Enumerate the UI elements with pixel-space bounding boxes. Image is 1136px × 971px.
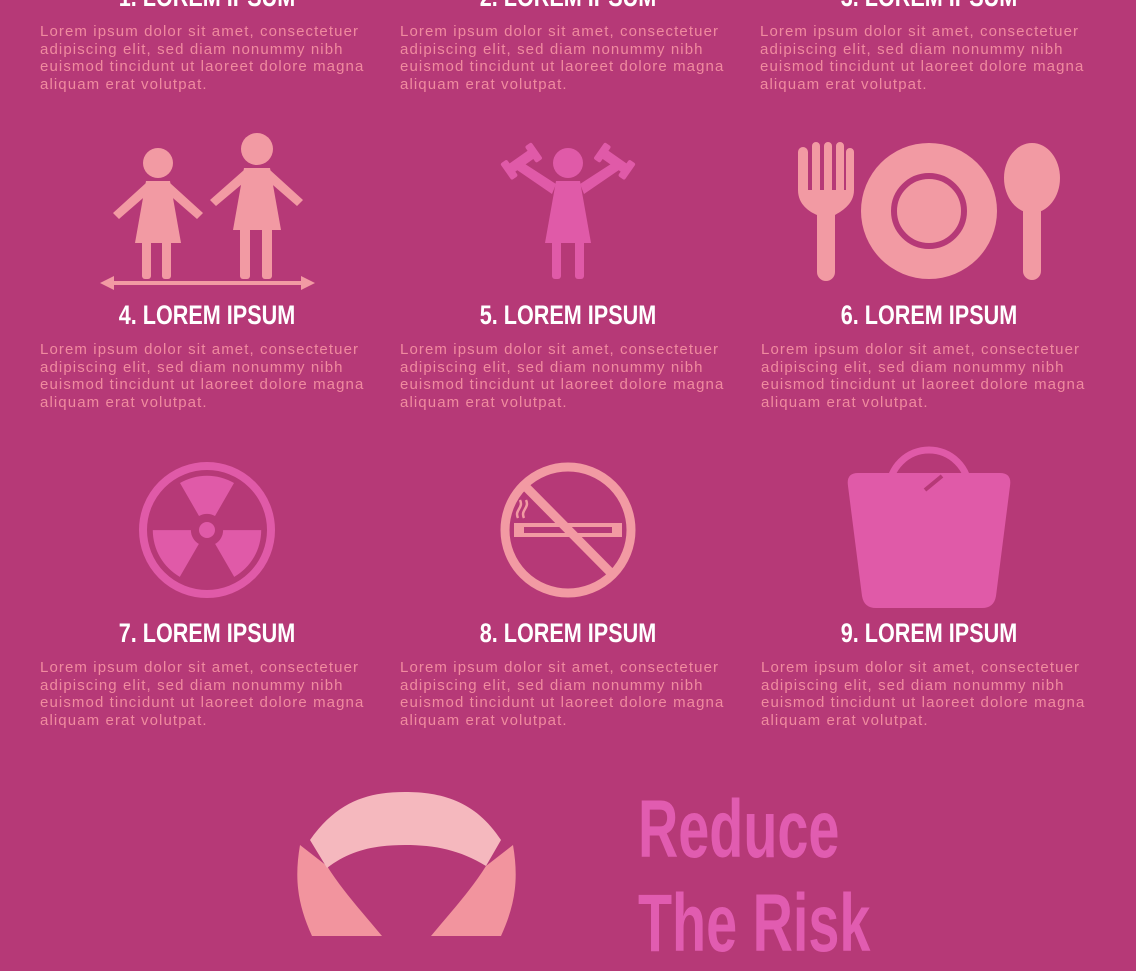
text 4: adipiscing elit, sed diam nonummy nibh <box>40 359 344 376</box>
icon: radiation <box>143 466 271 594</box>
text 5: adipiscing elit, sed diam nonummy nibh <box>400 359 704 376</box>
text 6: Lorem ipsum dolor sit amet, consectetuer <box>761 341 1080 358</box>
text 7: Lorem ipsum dolor sit amet, consectetuer <box>40 659 359 676</box>
text 2: Lorem ipsum dolor sit amet, consectetuer <box>400 23 719 40</box>
text 4 <box>40 341 364 411</box>
icon: fork plate spoon <box>798 142 1060 281</box>
text 6: aliquam erat volutpat. <box>761 394 929 411</box>
text 6 <box>761 341 1085 411</box>
text 8: aliquam erat volutpat. <box>400 712 568 729</box>
text 1: aliquam erat volutpat. <box>40 76 208 93</box>
text 8: Lorem ipsum dolor sit amet, consectetuer <box>400 659 719 676</box>
text 7: adipiscing elit, sed diam nonummy nibh <box>40 677 344 694</box>
title: Reduce The Risk <box>638 784 870 969</box>
text 6: euismod tincidunt ut laoreet dolore magna <box>761 376 1085 393</box>
heading 4: 4. LOREM IPSUM <box>119 300 295 330</box>
text 3: adipiscing elit, sed diam nonummy nibh <box>760 41 1064 58</box>
text 3: aliquam erat volutpat. <box>760 76 928 93</box>
text 5: aliquam erat volutpat. <box>400 394 568 411</box>
text 9: Lorem ipsum dolor sit amet, consectetuer <box>761 659 1080 676</box>
text 8: euismod tincidunt ut laoreet dolore magna <box>400 694 724 711</box>
heading 6: 6. LOREM IPSUM <box>841 300 1017 330</box>
text 2: aliquam erat volutpat. <box>400 76 568 93</box>
heading 8: 8. LOREM IPSUM <box>480 618 656 648</box>
text 1: adipiscing elit, sed diam nonummy nibh <box>40 41 344 58</box>
text 5: euismod tincidunt ut laoreet dolore magna <box>400 376 724 393</box>
text 4: aliquam erat volutpat. <box>40 394 208 411</box>
text 5 <box>400 341 724 411</box>
text 8: adipiscing elit, sed diam nonummy nibh <box>400 677 704 694</box>
text 2 <box>400 23 724 93</box>
text 4: euismod tincidunt ut laoreet dolore magna <box>40 376 364 393</box>
text 1: Lorem ipsum dolor sit amet, consectetuer <box>40 23 359 40</box>
text 9: adipiscing elit, sed diam nonummy nibh <box>761 677 1065 694</box>
text 5: Lorem ipsum dolor sit amet, consectetuer <box>400 341 719 358</box>
heading 5: 5. LOREM IPSUM <box>480 300 656 330</box>
text 3: euismod tincidunt ut laoreet dolore magna <box>760 58 1084 75</box>
text 7: euismod tincidunt ut laoreet dolore magna <box>40 694 364 711</box>
heading 9: 9. LOREM IPSUM <box>841 618 1017 648</box>
text 3: Lorem ipsum dolor sit amet, consectetuer <box>760 23 1079 40</box>
text 2: adipiscing elit, sed diam nonummy nibh <box>400 41 704 58</box>
icon: pink ribbon <box>297 792 516 936</box>
text 9: euismod tincidunt ut laoreet dolore magna <box>761 694 1085 711</box>
icon: two girls with arrow <box>100 133 315 290</box>
icon: girl with dumbbells <box>500 142 636 279</box>
text 7: aliquam erat volutpat. <box>40 712 208 729</box>
text 2: euismod tincidunt ut laoreet dolore magna <box>400 58 724 75</box>
text 9: aliquam erat volutpat. <box>761 712 929 729</box>
text 3 <box>760 23 1084 93</box>
text 1 <box>40 23 364 93</box>
icon: weight scale bag <box>848 450 1010 608</box>
heading 7: 7. LOREM IPSUM <box>119 618 295 648</box>
title: Reduce The Risk: The Risk <box>638 878 870 969</box>
text 1: euismod tincidunt ut laoreet dolore magna <box>40 58 364 75</box>
icon: no smoking <box>505 467 631 593</box>
text 6: adipiscing elit, sed diam nonummy nibh <box>761 359 1065 376</box>
title: Reduce The Risk: Reduce <box>638 784 839 875</box>
text 4: Lorem ipsum dolor sit amet, consectetuer <box>40 341 359 358</box>
text 8 <box>400 659 724 729</box>
text 9 <box>761 659 1085 729</box>
text 7 <box>40 659 364 729</box>
